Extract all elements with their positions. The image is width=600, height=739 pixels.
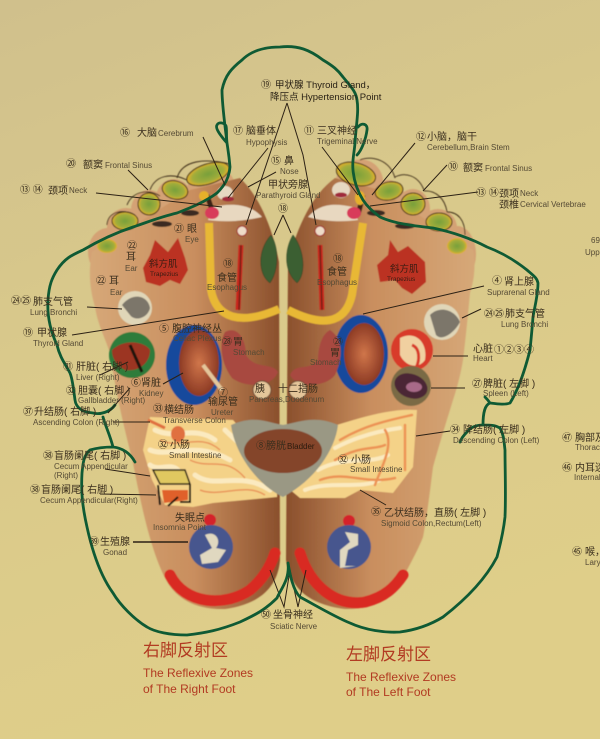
title: reflexive zones of the right foot: [143, 641, 253, 696]
label: ear 1: ㉒: [127, 240, 137, 252]
label: trigeminal nerve: 三叉神经: [317, 124, 357, 137]
bladder: [231, 420, 338, 497]
label: sciatic nerve: 坐骨神经: [273, 608, 313, 621]
label: small intestine, left foot: ㉜: [338, 454, 348, 466]
label: ear 2: [96, 275, 123, 297]
label: stomach, right foot: 胃: [233, 336, 243, 348]
label: thyroid gland / hypertension point: [261, 79, 382, 103]
label: esophagus, right foot: 食管: [217, 271, 237, 284]
label: gonad: 生殖腺: [100, 535, 130, 548]
label: esophagus, left foot: 食管: [327, 265, 347, 278]
label: neck, right foot: Neck: [69, 186, 88, 195]
label: frontal sinus, left foot: [448, 161, 532, 174]
label: sigmoid colon, rectum: 乙状结肠，直肠( 左脚 ): [384, 506, 486, 519]
label: eye: Eye: [185, 235, 199, 244]
label: small intestine, left foot: 小肠: [351, 454, 371, 466]
label: liver: 肝脏( 右脚 ): [76, 360, 128, 373]
label: stomach, left foot: Stomach: [310, 358, 342, 367]
sciatic pointer lines: [270, 570, 306, 607]
label: thoracic: [562, 431, 600, 452]
label: cecum appendicular 1: [43, 449, 128, 480]
label: nose: [271, 154, 299, 176]
title: reflexive zones of the left foot: of The Left Foot: [346, 685, 431, 699]
label: suprarenal gland: Suprarenal Gland: [487, 288, 550, 297]
label: liver: Liver (Right): [76, 373, 120, 382]
label: pancreas, duodenum: Pancreas,Duodenum: [249, 395, 324, 404]
title: reflexive zones of the right foot: 右脚反射区: [143, 641, 228, 660]
label: celiac plexus: Celiac Plexus: [173, 334, 221, 343]
label: cerebellum, brain stem: 小脑，脑干: [427, 130, 477, 143]
label: cecum appendicular 1: (Right): [54, 471, 78, 480]
label: kidney: [131, 376, 163, 398]
label: transverse colon: 横结肠: [164, 403, 194, 416]
label: stomach, left foot: [310, 336, 343, 367]
label: frontal sinus, left foot: ⑩: [448, 161, 458, 173]
label: nose: ⑮: [271, 155, 281, 167]
label: insomnia point: [153, 511, 207, 532]
label: esophagus, right foot: ⑱: [223, 258, 233, 270]
toe contour lines: [107, 158, 465, 235]
label: lung bronchi, right foot: [11, 295, 77, 317]
label: neck and cervical vertebrae, left foot: [476, 187, 586, 211]
label: spleen: [472, 377, 535, 398]
label: liver: ㉛: [63, 361, 73, 373]
label: cerebrum: [120, 126, 194, 139]
label: ureter: 输尿管: [208, 395, 238, 408]
label: cropped upper label: [585, 236, 600, 257]
label: ascending colon: Ascending Colon (Right): [33, 418, 120, 427]
label: larynx: [572, 546, 600, 567]
label: lung bronchi, left foot: [484, 307, 548, 329]
label: trapezius, right foot: [149, 258, 179, 278]
label: gonad: Gonad: [103, 548, 127, 557]
label: celiac plexus: [159, 322, 222, 343]
title: reflexive zones of the left foot: The Reflexive Zones: [346, 670, 456, 684]
thyroid band: yellow: [209, 223, 363, 321]
label: pancreas, duodenum: 十二指肠: [278, 382, 318, 395]
label: lung bronchi, left foot: ㉔㉕: [484, 308, 504, 320]
label: ureter: [208, 387, 238, 417]
label: cerebellum, brain stem: ⑫: [416, 131, 426, 143]
label: descending colon: 降结肠( 左脚 ): [463, 423, 525, 436]
label: trapezius, left foot: Trapezius: [387, 276, 416, 283]
label: cecum appendicular 1: ㊳: [43, 450, 53, 462]
label: heart: ①②③④: [494, 344, 534, 356]
kidneys: [166, 315, 388, 405]
label: spleen: ㉗: [472, 378, 482, 390]
label: internal ear: ㊻: [562, 462, 572, 474]
label: transverse colon: ㉝: [153, 403, 163, 415]
label: frontal sinus, right foot: 额窦: [83, 158, 103, 171]
cecum outline: [153, 470, 190, 506]
label: hypophysis: ⑰: [233, 125, 243, 137]
heart disc: [391, 329, 433, 371]
label: neck and cervical vertebrae, left foot: 颈项: [499, 188, 519, 200]
illustration: feet and organs: [88, 151, 476, 609]
label: kidney: 肾脏: [141, 376, 161, 389]
label: nose: 鼻: [284, 154, 294, 167]
label: internal ear: Internal: [574, 473, 600, 482]
intestines, left foot: [288, 410, 417, 498]
label: neck and cervical vertebrae, left foot: 颈椎: [499, 198, 519, 211]
heel bands: sciatic nerve: [170, 553, 403, 603]
label: insomnia point: Insomnia Point: [153, 523, 207, 532]
label: hypophysis: Hypophysis: [246, 138, 287, 147]
label: esophagus, left foot: Esophagus: [317, 278, 357, 287]
label: cecum appendicular 2: 盲肠阑尾( 右脚 ): [41, 483, 113, 496]
label: stomach, right foot: [222, 336, 265, 357]
label: cropped upper label: 69: [591, 236, 600, 245]
label: trigeminal nerve: ⑪: [304, 125, 314, 137]
label: cerebellum, brain stem: Cerebellum,Brain Stem: [427, 143, 510, 152]
label: heart: Heart: [473, 354, 493, 363]
label: cerebrum: Cerebrum: [158, 129, 194, 138]
label: pancreas, duodenum: 胰: [255, 382, 265, 395]
label: frontal sinus, right foot: ⑳: [66, 158, 76, 170]
label: small intestine, left foot: [338, 454, 403, 474]
label: heart: [473, 342, 534, 363]
label: neck, right foot: 颈项: [48, 185, 68, 197]
label: gallbladder: [66, 384, 145, 405]
label: kidney: Kidney: [139, 389, 163, 398]
label: thyroid gland: ⑲: [23, 327, 33, 339]
label: neck, right foot: [20, 184, 88, 197]
label: bladder: ⑧: [256, 440, 266, 452]
label: thyroid gland / hypertension point: ⑲: [261, 79, 271, 91]
label: trigeminal nerve: Trigeminal Nerve: [317, 137, 378, 146]
label: lung bronchi, left foot: Lung Bronchi: [501, 320, 548, 329]
label: parathyroid gland: [256, 178, 320, 200]
label: eye: ㉑: [174, 223, 184, 235]
label: cerebrum: ⑯: [120, 127, 130, 139]
label: ascending colon: 升结肠( 右脚 ): [34, 405, 96, 418]
label: cecum appendicular 1: 盲肠阑尾( 右脚 ): [54, 449, 126, 462]
label: bladder: [256, 439, 315, 452]
label: trapezius, right foot: 斜方肌: [149, 258, 178, 270]
label: liver: [63, 360, 128, 382]
label: gallbladder: Gallbladder (Right): [78, 396, 145, 405]
label: ear 2: ㉒: [96, 275, 106, 287]
label: internal ear: [562, 461, 600, 482]
label: sigmoid colon, rectum: ㉟: [371, 506, 381, 518]
label: lung bronchi, right foot: Lung Bronchi: [30, 308, 77, 317]
parathyroid leaves: [261, 235, 303, 283]
label: esophagus, right foot: [207, 258, 247, 292]
label: bladder: 膀胱: [266, 439, 286, 452]
label: lung bronchi, left foot: 肺支气管: [505, 307, 545, 320]
label: small intestine, right foot: 小肠: [170, 439, 190, 451]
label: suprarenal gland: [487, 275, 550, 297]
label: gonad: ㊴: [89, 536, 99, 548]
label: kidney: ⑥: [131, 377, 141, 389]
toe nails: [97, 158, 467, 254]
label: trapezius, left foot: [387, 263, 419, 283]
label: spleen: 脾脏( 左脚 ): [483, 377, 535, 390]
label: small intestine, right foot: [158, 439, 222, 460]
label: sciatic nerve: Sciatic Nerve: [270, 622, 318, 631]
label: hypophysis: 脑垂体: [246, 124, 276, 137]
label: neck and cervical vertebrae, left foot: Neck: [520, 189, 539, 198]
label: neck, right foot: ⑬ ⑭: [20, 184, 43, 196]
trapezius muscles: [143, 238, 426, 294]
label: thoracic: ㊼: [562, 432, 572, 444]
label: ear 2: Ear: [110, 288, 123, 297]
label: thyroid gland / hypertension point: 甲状腺 Thyroid Gland，: [275, 79, 375, 91]
label: celiac plexus: ⑤: [159, 323, 169, 335]
label: small intestine, right foot: Small Intestine: [169, 451, 222, 460]
label: small intestine, left foot: Small Intestine: [350, 465, 403, 474]
title: reflexive zones of the right foot: The Reflexive Zones: [143, 666, 253, 680]
title: reflexive zones of the right foot: of The Right Foot: [143, 682, 236, 696]
label: heart: 心脏: [473, 342, 493, 355]
label: neck and cervical vertebrae, left foot: Cervical Vertebrae: [520, 200, 586, 209]
label: cerebellum, brain stem: [416, 130, 510, 152]
label: ureter: ⑦: [218, 387, 228, 399]
label: eye: 眼: [187, 223, 197, 235]
stomachs: [221, 330, 341, 385]
label: parathyroid gland: Parathyroid Gland: [256, 191, 320, 200]
label: esophagus, left foot: [317, 253, 357, 287]
gonad discs: [189, 525, 371, 569]
eyes and face reflex points: [152, 182, 415, 236]
pointer lines: [72, 103, 484, 542]
label: stomach, right foot: Stomach: [233, 348, 265, 357]
title: reflexive zones of the left foot: [346, 645, 456, 699]
label: spleen: Spleen (Left): [483, 389, 529, 398]
label: frontal sinus, right foot: [66, 158, 152, 171]
label: gonad: [89, 535, 130, 557]
label: frontal sinus, left foot: Frontal Sinus: [485, 164, 532, 173]
label: stomach, right foot: ㉘: [222, 336, 232, 348]
green marker outline: [48, 47, 538, 635]
label: celiac plexus: 腹腔神经丛: [172, 322, 222, 335]
label: stomach, left foot: 胃: [330, 347, 340, 359]
left foot (viewer right): [286, 151, 476, 609]
label: neck and cervical vertebrae, left foot: ⑬ ⑭: [476, 187, 499, 199]
label: trapezius, right foot: Trapezius: [150, 271, 179, 278]
label: trigeminal nerve: [304, 124, 378, 146]
label: cecum appendicular 1: Cecum Appendicular: [54, 462, 128, 471]
label: cecum appendicular 2: [30, 483, 138, 505]
label: sciatic nerve: ㊿: [261, 609, 271, 621]
label: trapezius, left foot: 斜方肌: [390, 263, 419, 275]
label: ascending colon: ㊲: [23, 406, 33, 418]
label: pancreas, duodenum: [249, 382, 324, 404]
label: suprarenal gland: 肾上腺: [504, 275, 534, 288]
label: insomnia point: 失眠点: [175, 511, 205, 524]
label: lung bronchi, right foot: ㉔㉕: [11, 295, 31, 307]
label: ear 1: [125, 240, 138, 273]
label: ear 1: Ear: [125, 264, 138, 273]
label: eye: [174, 223, 199, 244]
label: ureter: Ureter: [211, 408, 234, 417]
label: 18: ⑱: [278, 203, 288, 215]
intestines, right foot: [143, 417, 277, 507]
label: suprarenal gland: ④: [492, 275, 502, 287]
pancreas and duodenum: [253, 381, 307, 399]
label: thyroid gland: Thyroid Gland: [33, 339, 83, 348]
label: gallbladder: ㉜: [66, 385, 76, 397]
label: frontal sinus, right foot: Frontal Sinus: [105, 161, 152, 170]
label: thyroid gland: [23, 326, 83, 348]
esophagus: [238, 245, 322, 310]
label: sigmoid colon, rectum: [371, 506, 486, 528]
label: small intestine, right foot: ㉜: [158, 439, 168, 451]
label: descending colon: Descending Colon (Left): [453, 436, 540, 445]
lung bronchi discs: [118, 291, 460, 340]
label: ear 1: 耳: [126, 251, 136, 263]
spleen disc: [391, 366, 431, 406]
label: parathyroid gland: 甲状旁腺: [268, 178, 308, 191]
label: frontal sinus, left foot: 额窦: [463, 161, 483, 174]
label: nose: Nose: [280, 167, 299, 176]
label: cecum appendicular 2: Cecum Appendicular(Right): [40, 496, 138, 505]
liver disc: [109, 332, 155, 378]
label: sigmoid colon, rectum: Sigmoid Colon,Rectum(Left): [381, 519, 482, 528]
label: hypophysis: [233, 124, 287, 147]
label: descending colon: ㉞: [450, 424, 460, 436]
label: lung bronchi, right foot: 肺支气管: [33, 295, 73, 308]
label: stomach, left foot: ㉘: [333, 336, 343, 348]
labels: [11, 79, 600, 631]
label: sciatic nerve: [261, 608, 318, 631]
label: larynx: ㊺: [572, 546, 582, 558]
label: esophagus, right foot: Esophagus: [207, 283, 247, 292]
label: cerebrum: 大脑: [137, 126, 157, 139]
label: bladder: Bladder: [287, 442, 315, 451]
right foot (viewer left): [88, 156, 280, 609]
insomnia points: [204, 514, 355, 527]
label: ear 2: 耳: [109, 275, 119, 287]
title: reflexive zones of the left foot: 左脚反射区: [346, 645, 431, 664]
label: gallbladder: 胆囊( 右脚 ): [78, 384, 130, 397]
label: esophagus, left foot: ⑱: [333, 253, 343, 265]
label: thyroid gland / hypertension point: 降压点 Hypertension Point: [270, 91, 382, 103]
label: transverse colon: [153, 403, 226, 425]
label: ascending colon: [23, 405, 120, 427]
label: descending colon: [450, 423, 540, 445]
label: thyroid gland: 甲状腺: [37, 326, 67, 339]
label: cecum appendicular 2: ㊳: [30, 484, 40, 496]
label: transverse colon: Transverse Colon: [163, 416, 226, 425]
